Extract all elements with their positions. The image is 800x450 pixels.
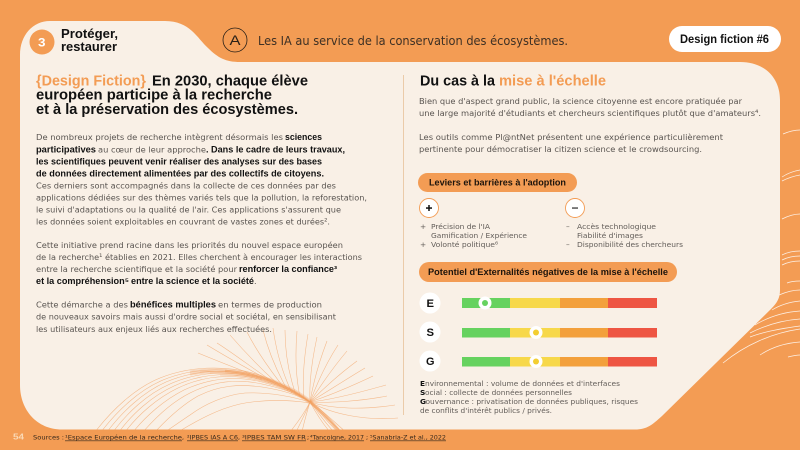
ESG row S	[420, 322, 657, 342]
badge: Design fiction #6: Design fiction #6	[680, 34, 769, 46]
section title	[61, 26, 118, 54]
sources: ⁵Sanabria-Z et al., 2022	[370, 434, 446, 442]
decorative feather fan	[95, 328, 398, 432]
sources: ;	[366, 434, 368, 442]
ESG legend: S	[420, 388, 425, 397]
ESG legend: ocial : collecte de données personnelles	[425, 388, 572, 397]
left paragraph 1: les scientifiques peuvent venir réaliser des analyses sur des bases	[36, 156, 322, 166]
sources: ³IPBES TAM SW FR	[242, 434, 307, 442]
barriers list: –	[566, 222, 570, 231]
left paragraph 1	[36, 132, 367, 226]
header subtitle: Les IA au service de la conservation des écosystèmes.	[258, 34, 568, 48]
left paragraph 3: de nouveaux savoirs mais aussi d'ordre social et sociétal, en sensibilisant	[36, 312, 337, 322]
ESG legend: de conflits d'intérêt publics / privés.	[420, 406, 552, 415]
left heading: et à la préservation des écosystèmes.	[36, 101, 298, 118]
page number: 54	[13, 432, 24, 442]
right intro text: Les outils comme Pl@ntNet présentent une expérience particulièrement	[419, 132, 724, 142]
left paragraph 2: de la recherche¹ établies en 2021. Elles cherchent à encourager les interactions	[36, 252, 362, 262]
barriers list	[566, 222, 683, 249]
sources: ,	[182, 434, 184, 442]
left paragraph 3: bénéfices multiples	[130, 300, 216, 310]
left paragraph 2	[36, 240, 362, 286]
left paragraph 1: participatives	[36, 144, 96, 154]
ESG legend	[420, 379, 638, 415]
section badge	[30, 30, 54, 54]
left paragraph 2: .	[254, 276, 257, 286]
pill: levers and barriers: Leviers et barrières à l'adoption	[429, 178, 566, 188]
levers list: Gamification / Expérience	[431, 231, 527, 240]
barriers list: Disponibilité des chercheurs	[577, 240, 683, 249]
section title: restaurer	[61, 39, 117, 54]
icon: circled A: A	[230, 32, 241, 48]
left paragraph 1: les données soient exploitables en couvrant de vastes zones et durées².	[36, 216, 330, 226]
sources: ⁴Tancoigne, 2017	[310, 434, 364, 442]
left heading: En 2030, chaque élève	[152, 72, 308, 90]
left paragraph 2: renforcer la confiance³	[239, 264, 337, 274]
ESG legend: G	[420, 397, 426, 406]
icon: circled A	[223, 28, 247, 52]
right heading	[420, 72, 606, 90]
pill: negative externalities: Potentiel d'Externalités négatives de la mise à l'échelle	[428, 267, 668, 277]
right intro text: Bien que d'aspect grand public, la science citoyenne est encore pratiquée par	[419, 96, 743, 106]
levers list	[420, 222, 527, 249]
sources	[33, 434, 446, 442]
badge: Design fiction #6	[669, 26, 781, 52]
left paragraph 2: entre la science et la société	[131, 276, 254, 286]
right heading: mise à l'échelle	[499, 72, 606, 90]
left heading	[36, 72, 308, 118]
ESG legend: E	[420, 379, 425, 388]
ESG row E: E	[426, 298, 434, 310]
left paragraph 1: sciences	[285, 132, 322, 142]
left paragraph 2: entre la recherche scientifique et la société pour	[36, 264, 238, 274]
icon: minus	[566, 198, 584, 218]
ESG row G: G	[426, 356, 434, 368]
left paragraph 1: au cœur de leur approche	[98, 144, 206, 154]
ESG row E	[420, 292, 657, 314]
ESG legend: nvironnemental : volume de données et d'interfaces	[425, 379, 620, 388]
right intro text: pertinente pour démocratiser la citizen science et le crowdsourcing.	[419, 144, 702, 154]
ESG row G	[420, 350, 657, 372]
decorative white strands on orange	[723, 130, 800, 363]
pill: levers and barriers	[418, 173, 577, 192]
sources: ²IPBES IAS A C6	[187, 434, 238, 442]
left heading: européen participe à la recherche	[36, 86, 272, 104]
right intro text: une large majorité d'étudiants et chercheurs scientifiques plutôt que d'amateurs⁴.	[419, 108, 761, 118]
left paragraph 1: applications dédiées sur des thèmes variés tels que la pollution, la reforestation,	[36, 192, 367, 202]
left paragraph 3: en termes de production	[218, 300, 322, 310]
left paragraph 3: les utilisateurs aux enjeux liés aux recherches effectuées.	[36, 324, 272, 334]
section badge: 3	[38, 36, 46, 50]
sources: ,	[238, 434, 240, 442]
left paragraph 2: et la compréhension⁵	[36, 276, 129, 286]
ESG legend: ouvernance : privatisation de données publiques, risques	[426, 397, 638, 406]
left paragraph 1: De nombreux projets de recherche intègrent désormais les	[36, 132, 283, 142]
levers list: +	[420, 240, 426, 249]
sources: ¹Espace Européen de la recherche	[65, 434, 182, 442]
barriers list: –	[566, 240, 570, 249]
left paragraph 2: Cette initiative prend racine dans les priorités du nouvel espace européen	[36, 240, 343, 250]
barriers list: Fiabilité d'images	[577, 231, 643, 240]
right intro text	[419, 96, 761, 154]
icon: plus	[420, 198, 438, 218]
sources: ;	[307, 434, 309, 442]
left paragraph 3	[36, 300, 337, 334]
left paragraph 1: Ces derniers sont accompagnés dans la collecte de ces données par des	[36, 180, 336, 190]
right heading: Du cas à la	[420, 72, 496, 90]
sources: Sources :	[33, 434, 64, 442]
levers list: +	[420, 222, 426, 231]
levers list: Volonté politique⁶	[431, 240, 498, 249]
section title: Protéger,	[61, 26, 118, 41]
barriers list: Accès technologique	[577, 222, 656, 231]
left paragraph 1: le suivi d'adaptations ou la qualité de l'air. Ces applications s'assurent que	[36, 204, 341, 214]
left heading: {Design Fiction}	[36, 72, 146, 90]
levers list: Précision de l'IA	[431, 222, 490, 231]
column divider	[403, 75, 404, 415]
left paragraph 1: de données directement alimentées par des collectifs de citoyens.	[36, 168, 324, 178]
left paragraph 3: Cette démarche a des	[36, 300, 128, 310]
ESG row S: S	[426, 327, 434, 339]
pill: negative externalities	[419, 262, 677, 282]
left paragraph 1: . Dans le cadre de leurs travaux,	[206, 144, 345, 154]
